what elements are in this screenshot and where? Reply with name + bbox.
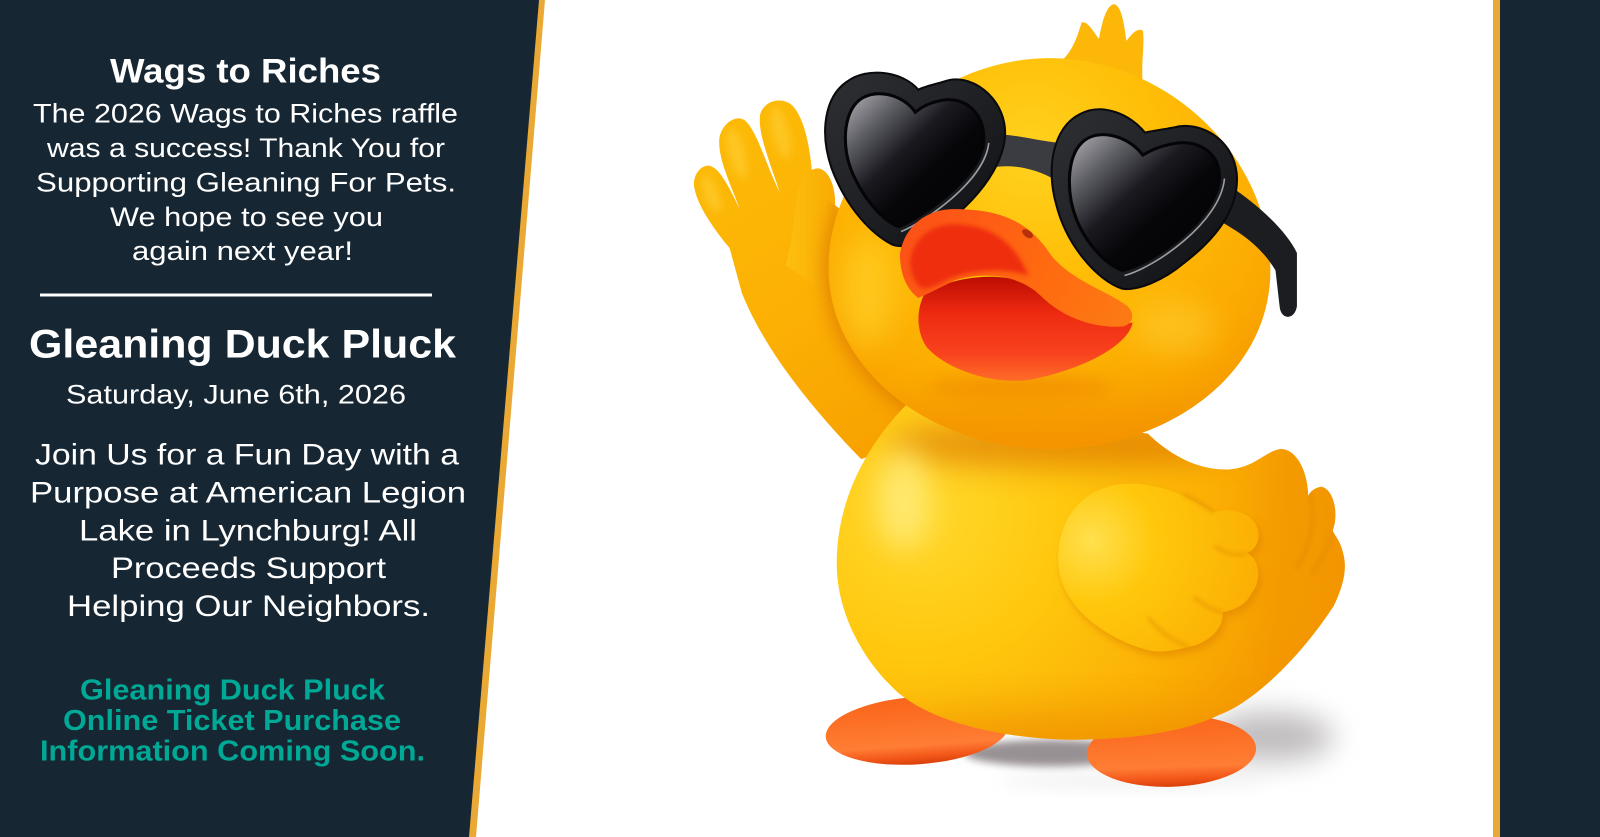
shadow cast by head on arm [816, 202, 906, 413]
temple arm [1222, 186, 1297, 317]
bridge [988, 134, 1059, 180]
callout: online ticket information: Information Coming Soon. [40, 736, 425, 768]
illustration: rubber duck with heart sunglasses [694, 4, 1345, 790]
body text: raffle thank you: We hope to see you [110, 202, 383, 232]
finger highlights [698, 105, 795, 215]
waving arm and hand [694, 100, 906, 460]
lower bill [918, 277, 1133, 381]
event description: Proceeds Support [111, 552, 387, 585]
head [828, 58, 1270, 449]
sunglasses [825, 73, 1297, 317]
event date: Saturday, June 6th, 2026 [66, 380, 406, 410]
event description: Purpose at American Legion [30, 476, 466, 510]
crest feathers [1061, 4, 1143, 97]
event description: Lake in Lynchburg! All [79, 514, 417, 548]
beak [900, 209, 1133, 381]
body text: raffle thank you: was a success! Thank You for [46, 133, 445, 163]
thumb [786, 168, 835, 296]
heading: Wags to Riches: Wags to Riches [110, 52, 381, 90]
panel: left navy slanted panel [0, 0, 545, 837]
ground shadow [964, 712, 1334, 788]
upper bill [900, 209, 1132, 327]
event description: Helping Our Neighbors. [67, 590, 430, 623]
left foot [823, 691, 1011, 771]
event description [30, 438, 466, 623]
upper bill red interior [910, 224, 1029, 288]
right lens [1052, 109, 1237, 289]
text block: Wags to Riches [33, 52, 458, 266]
body text: raffle thank you: The 2026 Wags to Riches raffle [33, 98, 458, 128]
right foot [1086, 712, 1257, 790]
body text: raffle thank you: again next year! [132, 236, 353, 266]
text block: Gleaning Duck Pluck event [29, 322, 466, 623]
panel: right navy strip [1493, 0, 1600, 837]
heading: Gleaning Duck Pluck: Gleaning Duck Pluck [29, 322, 457, 366]
callout: online ticket information: Gleaning Duck Pluck [80, 674, 386, 706]
event description: Join Us for a Fun Day with a [35, 438, 459, 472]
body text: raffle thank you: Supporting Gleaning For Pets. [36, 168, 456, 198]
body and tail [836, 405, 1345, 740]
left lens [825, 73, 1005, 246]
wing [1058, 484, 1262, 657]
body text: raffle thank you [33, 98, 458, 266]
callout: online ticket information: Online Ticket Purchase [63, 705, 401, 737]
callout: online ticket information [40, 674, 425, 768]
divider line [40, 294, 432, 296]
nostril [1020, 227, 1035, 240]
